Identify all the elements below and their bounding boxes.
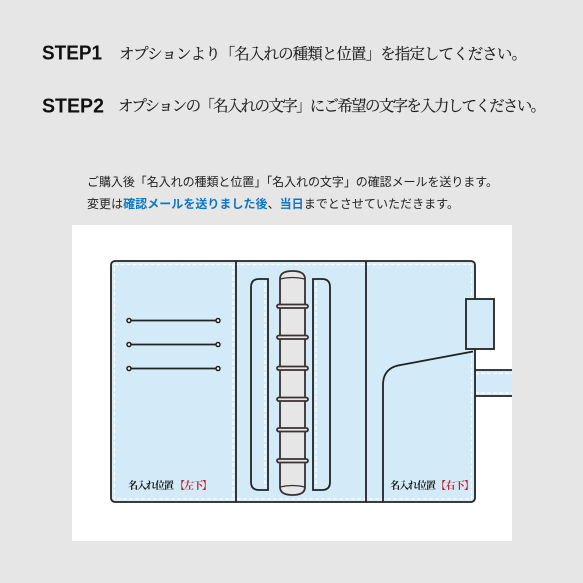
name position label: lower left: 【左下】 <box>175 479 212 492</box>
name position label: lower left: 名入れ位置 <box>128 479 174 492</box>
step 2 instruction: オプションの「名入れの文字」にご希望の文字を入力してください。 <box>118 96 546 115</box>
name position label: lower right: 名入れ位置 <box>390 479 436 492</box>
binder rings <box>277 271 308 495</box>
strap <box>475 370 512 396</box>
right pen slot <box>313 279 330 490</box>
name position label: lower right: 【右下】 <box>436 479 474 492</box>
left card slots <box>127 318 220 370</box>
step 1 instruction: オプションより「名入れの種類と位置」を指定してください。 <box>119 45 527 63</box>
name position label: lower right <box>390 479 474 492</box>
step 2 heading: STEP2 <box>42 96 104 118</box>
closure tab <box>466 299 494 349</box>
right pocket <box>383 352 473 502</box>
diagram panel <box>72 225 512 541</box>
left pen slot <box>251 279 268 490</box>
note line 2: 変更は確認メールを送りました後、当日までとさせていただきます。 <box>87 196 459 211</box>
name position label: lower left <box>128 479 212 492</box>
note line 1: ご購入後「名入れの種類と位置」「名入れの文字」の確認メールを送ります。 <box>87 174 498 189</box>
step 1 heading: STEP1 <box>42 42 102 64</box>
planner cover <box>111 261 475 502</box>
